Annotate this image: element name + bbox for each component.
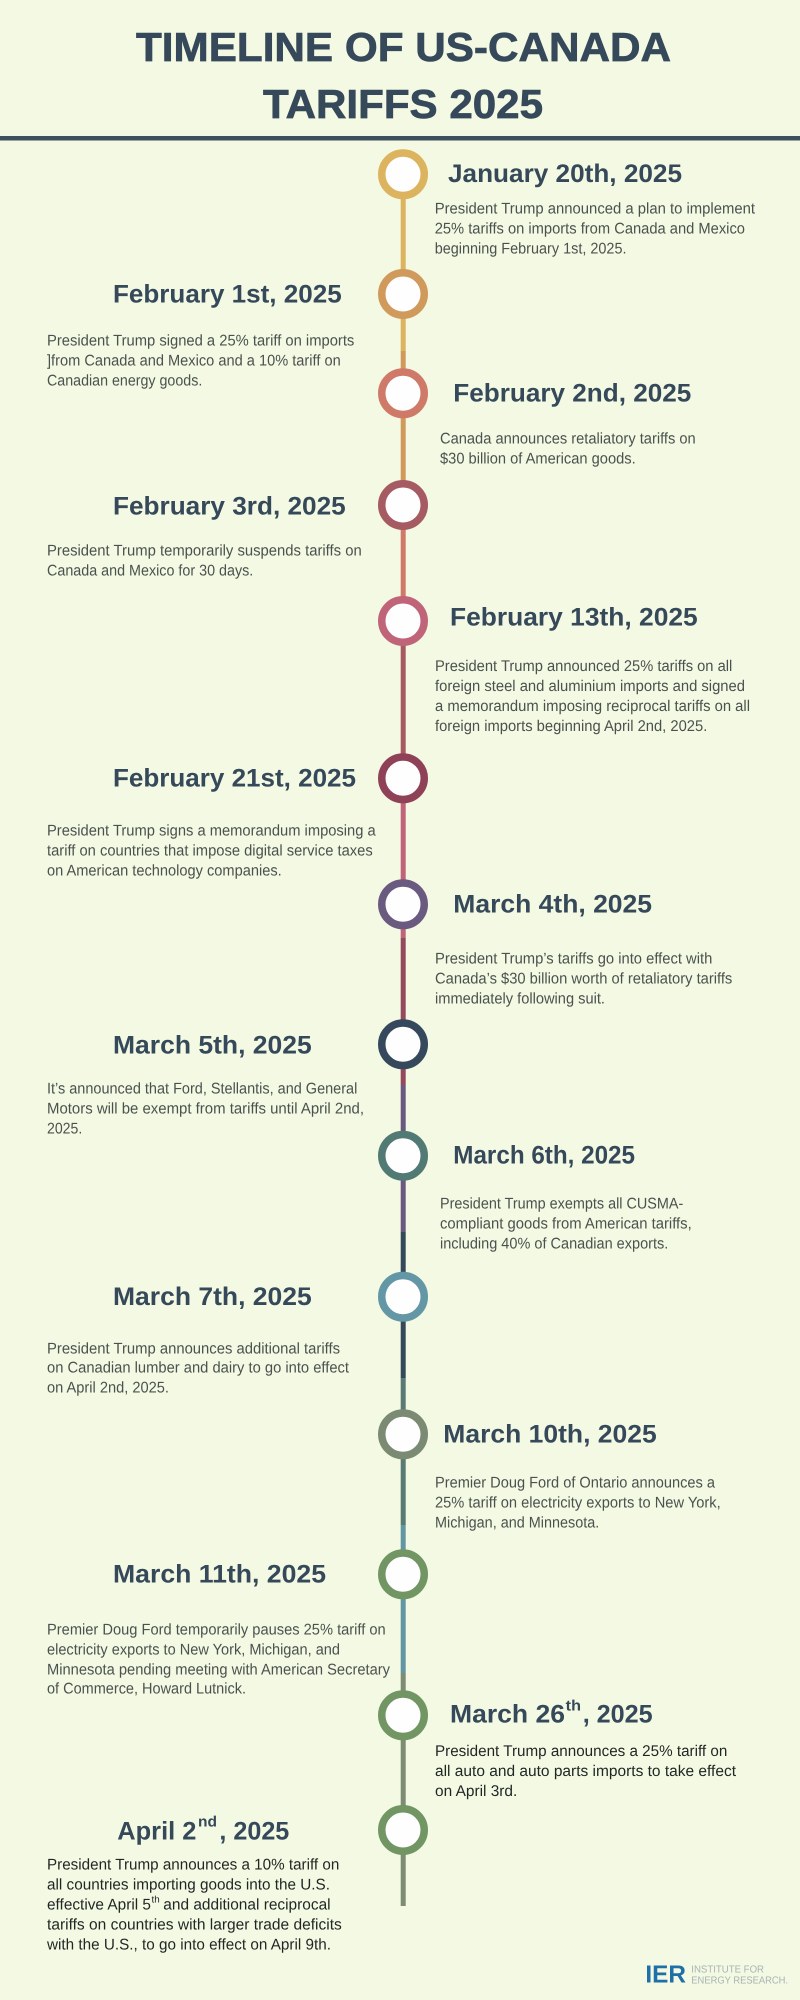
event: April 2nd: effective April 5 (47, 1896, 151, 1913)
event: March 10th (435, 1421, 721, 1531)
timeline markers (382, 153, 424, 1851)
title: TIMELINE OF US-CANADA (136, 24, 671, 70)
event: February 3rd (47, 492, 362, 579)
marker: February 2nd (382, 372, 424, 415)
marker: March 6th (382, 1134, 424, 1177)
event: April 2nd: President Trump announces a 10% tariff on (47, 1856, 339, 1873)
event: April 2nd: , 2025 (219, 1817, 289, 1845)
marker: February 3rd (382, 484, 424, 526)
event: March 7th: on April 2nd, 2025. (47, 1379, 169, 1396)
event: February 2nd: Canada announces retaliatory tariffs on (440, 430, 696, 447)
event: February 1st: February 1st, 2025 (113, 281, 342, 309)
event: February 13th: February 13th, 2025 (450, 604, 698, 632)
event: March 11th: March 11th, 2025 (113, 1561, 326, 1589)
event: March 6th: including 40% of Canadian exports. (440, 1235, 668, 1252)
event: February 1st: Canadian energy goods. (47, 372, 202, 389)
marker: February 13th (382, 600, 424, 642)
event: February 21st (47, 765, 376, 879)
event: February 3rd: President Trump temporarily suspends tariffs on (47, 542, 362, 559)
event: February 1st (47, 281, 355, 389)
event: March 10th: March 10th, 2025 (443, 1421, 657, 1449)
event: February 13th: a memorandum imposing reciprocal tariffs on all (435, 698, 750, 715)
event: March 11th: Minnesota pending meeting with American Secretary (47, 1661, 390, 1678)
event: March 4th (435, 891, 733, 1007)
marker: March 11th (382, 1553, 424, 1596)
event: April 2nd: tariffs on countries with larger trade deficits (47, 1916, 342, 1933)
title (136, 24, 671, 127)
event: March 6th (440, 1141, 692, 1252)
event: March 26th: on April 3rd. (435, 1783, 517, 1800)
event: March 26th: th (566, 1698, 581, 1715)
marker: March 10th (382, 1413, 424, 1456)
event: March 26th: , 2025 (583, 1701, 653, 1729)
event: March 7th: President Trump announces additional tariffs (47, 1340, 340, 1357)
event: February 13th: foreign imports beginning April 2nd, 2025. (435, 718, 707, 735)
event: March 26th: March 26 (450, 1701, 565, 1729)
event: March 5th: It’s announced that Ford, Stellantis, and General (47, 1080, 357, 1097)
logo: IER: ENERGY RESEARCH. (691, 1975, 788, 1986)
event: March 5th: Motors will be exempt from tariffs until April 2nd, (47, 1100, 364, 1117)
event: March 7th: on Canadian lumber and dairy to go into effect (47, 1359, 350, 1376)
event: March 5th (47, 1031, 364, 1137)
marker: February 21st (382, 757, 424, 800)
event: February 2nd: February 2nd, 2025 (453, 380, 691, 408)
event: February 2nd (440, 380, 696, 467)
event: March 4th: March 4th, 2025 (453, 891, 652, 919)
logo: IER: INSTITUTE FOR (691, 1964, 764, 1975)
event: April 2nd (46, 1814, 342, 1953)
event: April 2nd: with the U.S., to go into effect on April 9th. (46, 1936, 331, 1953)
event: March 4th: Canada’s $30 billion worth of retaliatory tariffs (435, 970, 733, 987)
event: March 4th: President Trump’s tariffs go into effect with (435, 950, 712, 967)
event: April 2nd: nd (198, 1814, 217, 1830)
event: April 2nd: April 2 (117, 1817, 196, 1845)
event: February 3rd: February 3rd, 2025 (113, 492, 346, 520)
event: February 13th: President Trump announced 25% tariffs on all (435, 658, 732, 675)
event: March 4th: immediately following suit. (435, 990, 605, 1007)
event: March 26th (435, 1698, 737, 1800)
marker: January 20th (382, 153, 424, 196)
event: March 6th: compliant goods from American tariffs, (440, 1215, 692, 1232)
event: January 20th: President Trump announced a plan to implement (435, 200, 756, 217)
marker: March 26th (382, 1694, 424, 1737)
event: January 20th: January 20th, 2025 (448, 160, 682, 188)
event: March 10th: Michigan, and Minnesota. (435, 1514, 599, 1531)
event: March 26th: all auto and auto parts imports to take effect (435, 1763, 737, 1780)
marker: April 2nd (382, 1809, 424, 1851)
event: February 1st: ]from Canada and Mexico and a 10% tariff on (47, 352, 341, 369)
event: March 11th: Premier Doug Ford temporarily pauses 25% tariff on (47, 1621, 386, 1638)
logo: IER: IER (645, 1962, 686, 1989)
event: April 2nd: th (152, 1895, 160, 1906)
event: March 10th: Premier Doug Ford of Ontario announces a (435, 1474, 715, 1491)
event: March 11th (47, 1561, 390, 1697)
event: February 21st: on American technology companies. (47, 862, 282, 879)
marker: March 4th (382, 883, 424, 926)
event: April 2nd: all countries importing goods into the U.S. (47, 1876, 330, 1893)
timeline spine (401, 174, 406, 1906)
event: January 20th: 25% tariffs on imports from Canada and Mexico (435, 220, 745, 237)
event: March 7th: March 7th, 2025 (113, 1283, 312, 1311)
event: February 21st: tariff on countries that impose digital service taxes (47, 842, 373, 859)
event: February 21st: President Trump signs a memorandum imposing a (47, 822, 376, 839)
marker: March 7th (382, 1275, 424, 1318)
marker: March 5th (382, 1023, 424, 1066)
marker: February 1st (382, 273, 424, 315)
event: March 6th: President Trump exempts all CUSMA- (440, 1195, 683, 1212)
event: February 2nd: $30 billion of American goods. (440, 450, 636, 467)
event: March 5th: 2025. (47, 1120, 82, 1137)
event: February 3rd: Canada and Mexico for 30 days. (47, 562, 253, 579)
event: February 21st: February 21st, 2025 (113, 765, 356, 793)
event: February 1st: President Trump signed a 25% tariff on imports (47, 332, 355, 349)
title: TARIFFS 2025 (263, 81, 543, 127)
event: February 13th: foreign steel and aluminium imports and signed (435, 678, 745, 695)
event: March 11th: of Commerce, Howard Lutnick. (47, 1680, 246, 1697)
event: April 2nd: and additional reciprocal (163, 1896, 331, 1913)
event: February 13th (435, 604, 750, 735)
event: March 5th: March 5th, 2025 (113, 1031, 312, 1059)
event: January 20th (435, 160, 756, 257)
event: March 26th: President Trump announces a 25% tariff on (435, 1743, 727, 1760)
event: January 20th: beginning February 1st, 2025. (435, 240, 626, 257)
event: March 7th (47, 1283, 350, 1396)
event: March 10th: 25% tariff on electricity exports to New York, (435, 1494, 721, 1511)
logo: IER (645, 1962, 788, 1989)
event: March 6th: March 6th, 2025 (453, 1141, 635, 1169)
event: March 11th: electricity exports to New York, Michigan, and (47, 1642, 340, 1659)
